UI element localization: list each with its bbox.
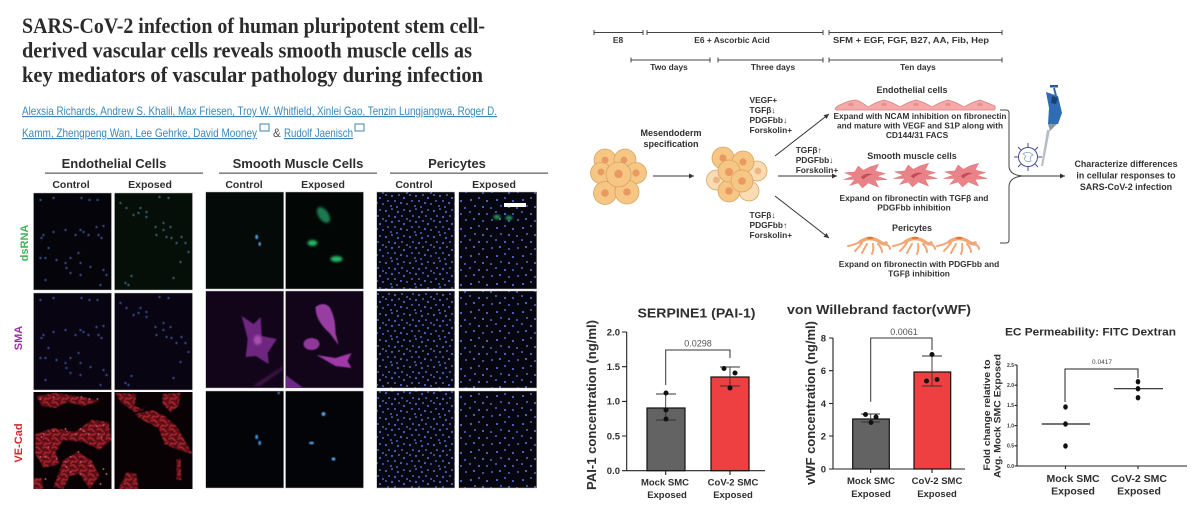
panel: microscopy column headers: Pericytes — [428, 156, 486, 171]
factor lists: TGFβ↓ — [750, 210, 776, 220]
significance bracket — [871, 327, 932, 402]
bar: CoV-2 — [914, 372, 951, 469]
axes: 4 — [821, 399, 827, 410]
timeline: Two days — [650, 62, 688, 72]
panel: smooth muscle cells lineage: Expand on fibronectin with TGFβ and — [840, 193, 988, 203]
icon: pericyte 1 — [848, 237, 890, 254]
image: pericyte exposed dsRNA — [459, 192, 537, 289]
chart title: EC Permeability: FITC Dextran — [1005, 326, 1176, 338]
timeline: E6 + Ascorbic Acid — [694, 35, 770, 45]
panel: smooth muscle cells lineage: Smooth muscle cells — [867, 151, 957, 161]
author list: Rudolf Jaenisch — [284, 127, 353, 140]
panel: endothelial cells lineage: Endothelial cells — [876, 85, 948, 95]
chart title: von Willebrand factor(vWF) — [787, 302, 971, 317]
panel: microscopy column headers — [45, 156, 548, 191]
factor lists: PDGFbb↓ — [750, 115, 787, 125]
panel: pericytes lineage: TGFβ inhibition — [888, 268, 950, 278]
chart: EC permeability dot plot — [982, 326, 1187, 498]
image: EC exposed SMA — [114, 293, 192, 390]
axes: 1.0 — [1007, 424, 1014, 430]
x labels: Exposed — [851, 489, 891, 500]
author list: Alexsia Richards, Andrew S. Khalil, Max Friesen, Troy W. Whitfield, Xinlei Gao, Tenzin Lungjangwa, Roger D. — [22, 105, 497, 118]
axes: 0 — [821, 464, 826, 476]
image: SMC control VE-Cad — [206, 391, 284, 488]
factor lists: TGFβ↓ — [750, 105, 776, 115]
outcome text — [1074, 159, 1178, 192]
x labels: Exposed — [1051, 486, 1095, 498]
image: SMC exposed dsRNA — [286, 192, 364, 289]
bar: CoV-2 — [711, 377, 749, 471]
factor lists: VEGF+ — [750, 95, 777, 105]
panel: microscopy column headers: Endothelial Cells — [62, 156, 166, 171]
panel: pericytes lineage: Pericytes — [892, 223, 932, 233]
panel: microscopy column headers: Exposed — [301, 179, 345, 191]
image: pericyte exposed VE-Cad — [459, 391, 537, 488]
significance bracket — [666, 338, 730, 385]
x labels — [847, 476, 962, 500]
image: pericyte control VE-Cad — [377, 391, 455, 488]
y axis label: PAI-1 concentration (ng/ml) — [585, 320, 599, 490]
image: EC control SMA — [34, 293, 112, 390]
error bars and points — [656, 366, 740, 422]
axes — [821, 334, 965, 476]
mesendoderm label: Mesendoderm — [640, 128, 702, 138]
panel: endothelial cells lineage: CD144/31 FACS — [886, 130, 949, 140]
axes: 1.5 — [607, 362, 621, 373]
data points and means — [1042, 379, 1163, 449]
panel: smooth muscle cells lineage: PDGFbb inhibition — [877, 202, 951, 212]
x labels: Exposed — [1117, 486, 1161, 498]
x labels: Exposed — [713, 490, 753, 501]
icon: pericyte 3 — [937, 237, 979, 254]
axes: 2.5 — [1007, 363, 1014, 369]
row labels: VE-Cad — [13, 423, 25, 463]
factor lists: Forskolin+ — [796, 165, 838, 175]
icon: smooth muscle cell 2 — [894, 163, 937, 187]
timeline: Three days — [751, 62, 795, 72]
x labels: CoV-2 SMC — [912, 476, 962, 487]
significance bracket: 0.0417 — [1092, 359, 1112, 366]
x labels: Exposed — [917, 489, 957, 500]
title — [22, 13, 485, 87]
axes — [1007, 363, 1187, 470]
factor lists: Forskolin+ — [750, 125, 792, 135]
axes: 2.0 — [1007, 383, 1014, 389]
title: SARS-CoV-2 infection of human pluripotent stem cell- — [22, 13, 485, 38]
icon: stem cell cluster — [590, 149, 646, 204]
y axis label: Avg. Mock SMC Exposed — [993, 354, 1004, 478]
chart title: SERPINE1 (PAI-1) — [638, 306, 756, 320]
icon: smooth muscle cell 3 — [944, 163, 987, 187]
outcome text: in cellular responses to — [1076, 170, 1176, 180]
axes: 2.0 — [607, 328, 620, 338]
panel: smooth muscle cells lineage — [840, 151, 988, 212]
outcome text: Characterize differences — [1074, 159, 1178, 169]
significance bracket: 0.0061 — [890, 327, 918, 337]
icon: virus — [1014, 143, 1042, 171]
axes: 0.5 — [607, 432, 621, 442]
axes: 0.5 — [1007, 444, 1014, 450]
panel: endothelial cells lineage: Expand with NCAM inhibition on fibronectin — [834, 111, 1006, 121]
bar: mock — [853, 419, 889, 469]
x labels: Exposed — [647, 490, 687, 501]
image: EC control dsRNA — [34, 193, 112, 290]
timeline: E8 — [613, 35, 623, 45]
axes: 6 — [821, 366, 826, 377]
panel: endothelial cell micrographs — [34, 193, 192, 489]
icon: smooth muscle cell 1 — [844, 164, 887, 188]
outcome text: SARS-CoV-2 infection — [1080, 182, 1172, 192]
image: SMC exposed SMA — [286, 291, 364, 388]
author list: & — [273, 127, 281, 140]
x labels — [641, 478, 758, 501]
panel: microscopy column headers: Exposed — [472, 179, 516, 191]
image: pericyte control dsRNA — [377, 192, 455, 289]
panel: pericytes lineage: Expand on fibronectin with PDGFbb and — [839, 259, 999, 269]
axes: 1.0 — [607, 396, 620, 408]
title: derived vascular cells reveals smooth muscle cells as — [22, 38, 472, 62]
panel: microscopy column headers: Exposed — [128, 179, 172, 191]
arrow: specification — [653, 175, 694, 177]
error bars and points — [861, 352, 942, 425]
icon: differentiating cell cluster — [706, 147, 767, 202]
bracket and outcome arrow — [1000, 110, 1065, 243]
panel: endothelial cells lineage: and mature with VEGF and S1P along with — [837, 120, 1003, 130]
y axis label: vWF concentration (ng/ml) — [804, 321, 818, 485]
arrows: lineage branches — [775, 114, 837, 238]
image: EC exposed dsRNA — [114, 193, 192, 290]
icon: pericyte 2 — [893, 237, 935, 254]
axes: 8 — [821, 334, 826, 344]
axes: 0.0 — [1007, 464, 1014, 470]
title: key mediators of vascular pathology during infection — [22, 62, 483, 87]
y axis label: Fold change relative to — [982, 359, 993, 470]
significance bracket: 0.0298 — [684, 338, 712, 348]
x labels: Mock SMC — [641, 478, 689, 488]
x labels: CoV-2 SMC — [1111, 473, 1167, 485]
x labels — [1046, 473, 1167, 498]
panel: microscopy column headers: Smooth Muscle Cells — [233, 156, 363, 171]
image: pericyte control SMA — [377, 291, 455, 388]
image: SMC control dsRNA — [206, 192, 284, 289]
bar: mock — [647, 408, 685, 471]
timeline: SFM + EGF, FGF, B27, AA, Fib, Hep — [833, 35, 989, 45]
x labels: Mock SMC — [847, 476, 895, 487]
mesendoderm label: specification — [643, 139, 699, 149]
chart: vWF bar chart — [787, 302, 971, 500]
panel: microscopy column headers: Control — [225, 179, 263, 191]
author list: Kamm, Zhengpeng Wan, Lee Gehrke, David Mooney — [22, 127, 257, 140]
axes: 1.5 — [1007, 403, 1014, 409]
image: pericyte exposed SMA — [459, 291, 537, 388]
author list — [22, 105, 497, 140]
row labels: SMA — [13, 326, 25, 350]
panel: microscopy column headers: Control — [52, 179, 90, 191]
image: EC exposed VE-Cad — [114, 392, 192, 489]
x labels: Mock SMC — [1046, 473, 1100, 485]
panel: microscopy column headers: Control — [395, 179, 433, 191]
axes — [607, 328, 765, 477]
significance bracket — [1065, 359, 1138, 402]
factor lists: TGFβ↑ — [796, 145, 822, 155]
factor lists: PDGFbb↑ — [750, 220, 787, 230]
factor lists: Forskolin+ — [750, 230, 792, 240]
mesendoderm label — [640, 128, 702, 149]
chart: SERPINE1 bar chart — [585, 306, 765, 501]
panel: smooth muscle cell micrographs — [206, 192, 364, 488]
x labels: CoV-2 SMC — [708, 478, 758, 488]
timeline: Ten days — [900, 62, 936, 72]
panel: pericytes lineage — [839, 223, 999, 278]
timeline — [594, 30, 1002, 72]
icon: endothelial cell layer — [835, 100, 995, 110]
image: EC control VE-Cad — [34, 392, 112, 489]
axes: 2 — [821, 432, 826, 442]
image: SMC control SMA — [206, 291, 284, 388]
panel: endothelial cells lineage — [834, 85, 1006, 140]
panel: pericyte micrographs — [377, 192, 537, 488]
row labels — [13, 225, 31, 463]
axes: 0.0 — [607, 466, 620, 477]
factor lists: PDGFbb↓ — [796, 155, 833, 165]
row labels: dsRNA — [19, 225, 31, 261]
factor lists — [750, 95, 838, 240]
y axis label — [982, 354, 1004, 478]
image: SMC exposed VE-Cad — [286, 391, 364, 488]
icon: pipette — [1041, 85, 1062, 166]
